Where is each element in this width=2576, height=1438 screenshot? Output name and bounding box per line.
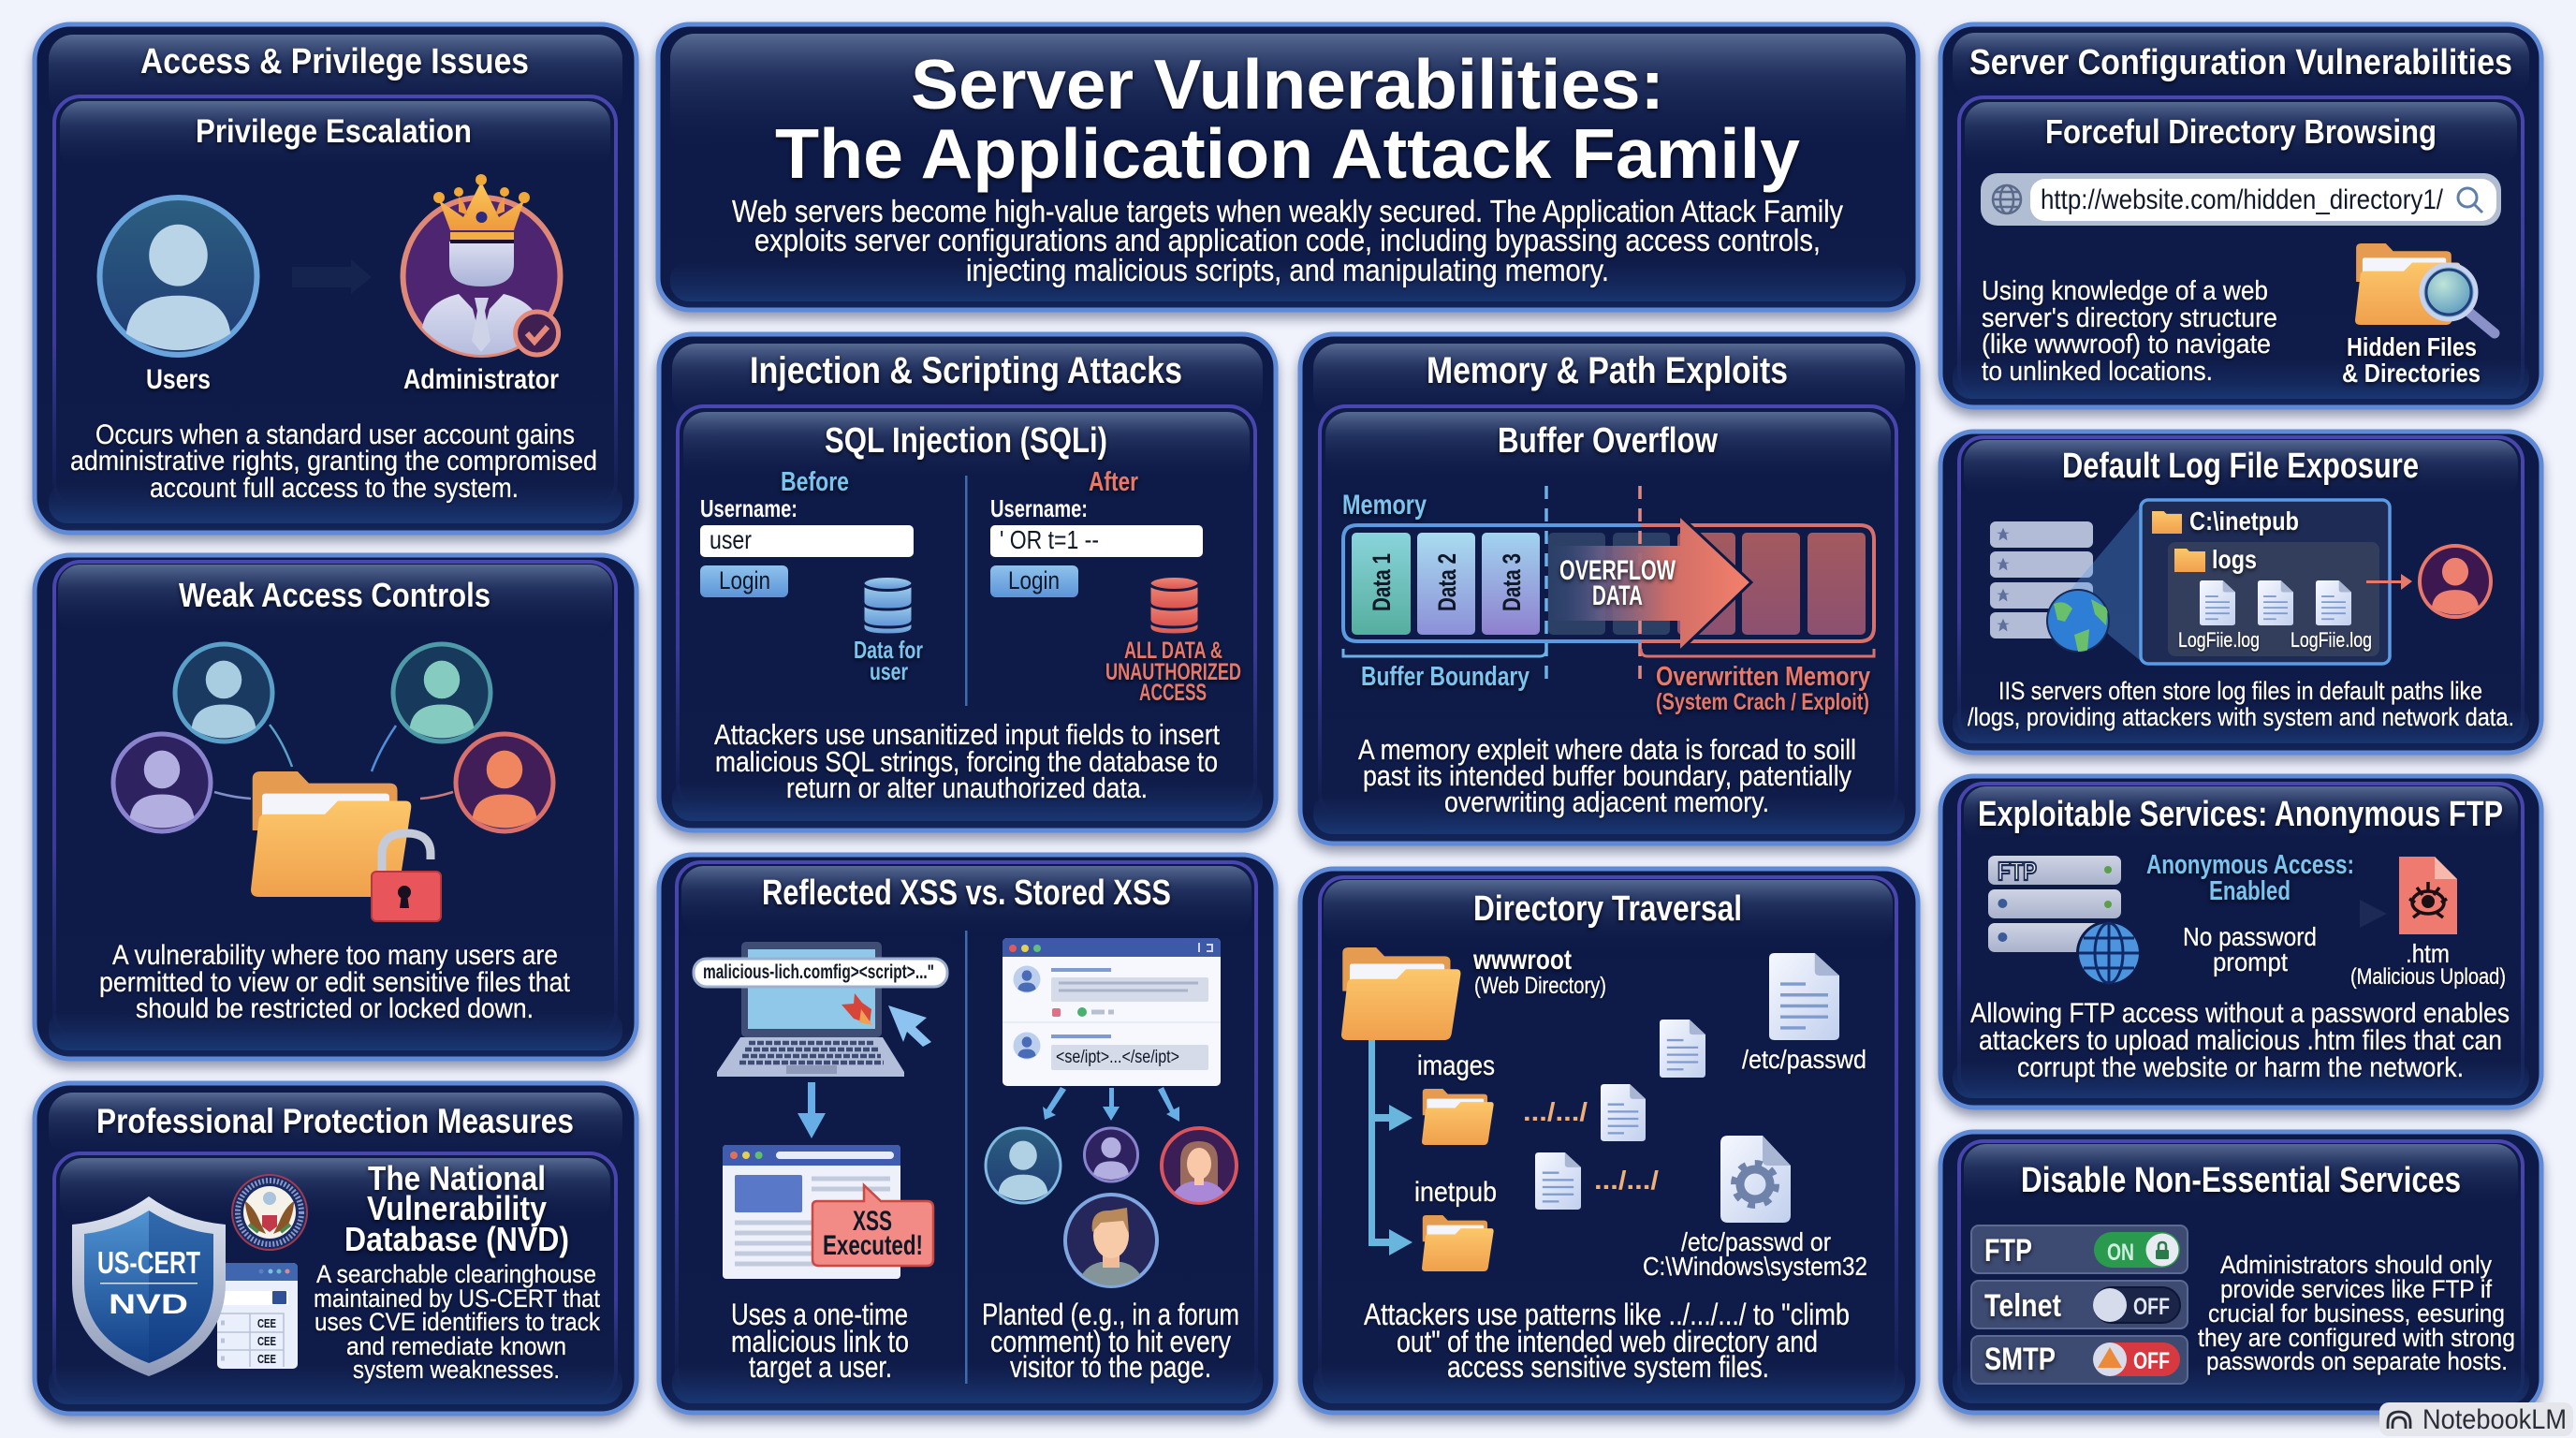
text block: intro: injecting malicious scripts, and manipulating memory.: [966, 253, 1609, 287]
label: administrator: Administrator: [403, 364, 559, 395]
icon: FTP server with globe: [1988, 856, 2142, 986]
text block: NVD description: maintained by US-CERT that: [314, 1284, 600, 1313]
label: wwwroot: (Web Directory): [1474, 973, 1606, 999]
heading: default log file exposure: Default Log File Exposure: [2062, 447, 2419, 486]
text block: disable services description: [2198, 1251, 2515, 1375]
chart: buffer overflow memory diagram: [1343, 486, 1874, 685]
label: malicious upload: (Malicious Upload): [2350, 964, 2506, 990]
icon: document middle: [1601, 1084, 1646, 1141]
panel: server configuration vulnerabilities: [1940, 24, 2541, 407]
text block: stored XSS description: comment) to hit every: [990, 1325, 1231, 1358]
text block: FTP description: [1970, 998, 2510, 1083]
heading: disable non-essential services: Disable Non-Essential Services: [2021, 1161, 2461, 1200]
file tree box: logs: [2212, 545, 2257, 574]
text block: forceful browsing description: server's directory structure: [1982, 303, 2277, 333]
text block: directory traversal description: [1364, 1298, 1850, 1384]
heading: the national vulnerability database: [344, 1159, 569, 1258]
label: all data and unauthorized access: UNAUTHORIZED: [1105, 659, 1241, 685]
address bar: http://website.com/hidden_directory1/: [2041, 184, 2444, 215]
panel: reflected vs stored XSS: [659, 855, 1276, 1413]
text block: weak access description: [99, 940, 571, 1024]
text block: stored XSS description: [982, 1298, 1239, 1384]
label: malicious upload: .htm: [2406, 939, 2450, 968]
arrow: upload: [2360, 900, 2387, 928]
chart: buffer overflow memory diagram: Data 1: [1368, 553, 1396, 611]
heading: the national vulnerability database: Database (NVD): [344, 1220, 569, 1258]
icon: user blue: [175, 644, 272, 741]
after column: [990, 467, 1203, 597]
icon: administrator with crown: [402, 174, 560, 374]
panel: memory and path exploits: [1300, 334, 1918, 844]
icon: user red: [456, 734, 553, 831]
label: overwritten memory: [1656, 662, 1870, 715]
icon: document top: [1660, 1020, 1705, 1078]
heading: injection and scripting attacks: Injection & Scripting Attacks: [750, 350, 1182, 391]
icon: visitor man: [1065, 1195, 1157, 1292]
icon: browser with XSS executed: XSS: [853, 1206, 892, 1237]
label: no password prompt: prompt: [2213, 947, 2288, 976]
text block: privilege escalation description: Occurs when a standard user account gains: [95, 419, 575, 450]
label: overwritten memory: Overwritten Memory: [1656, 662, 1870, 692]
text block: log exposure description: [1968, 677, 2514, 731]
arrows: script reaches visitors: [1043, 1087, 1179, 1122]
text block: NVD description: A searchable clearinghouse: [316, 1260, 596, 1288]
heading: reflected XSS vs stored XSS: Reflected XSS vs. Stored XSS: [762, 873, 1171, 913]
text block: SQL injection description: [714, 718, 1220, 804]
toggle: Telnet off: [1971, 1281, 2188, 1328]
text block: log exposure description: IIS servers often store log files in default paths like: [1998, 677, 2482, 705]
arrow: escalation: [292, 259, 372, 294]
label: hidden files and directories: & Directories: [2342, 359, 2481, 388]
text block: NVD description: uses CVE identifiers to track: [315, 1308, 600, 1336]
file tree box: LogFiie.log: [2178, 628, 2260, 652]
sub-heading: buffer overflow: Buffer Overflow: [1498, 421, 1718, 461]
heading: the national vulnerability database: Vulnerability: [367, 1189, 547, 1227]
text block: log exposure description: /logs, providing attackers with system and network data.: [1968, 703, 2514, 731]
icon: CVE table window: CEE: [257, 1352, 276, 1366]
icon: attacker: [2420, 546, 2491, 617]
address bar: [1981, 173, 2501, 226]
arrow: logs to attacker: [2366, 574, 2412, 590]
text block: NVD description: and remediate known: [346, 1332, 566, 1360]
text block: privilege escalation description: [70, 419, 597, 504]
panel: title: [658, 24, 1918, 310]
text block: NVD description: [314, 1260, 600, 1384]
text block: disable services description: crucial for business, eesuring: [2208, 1299, 2505, 1328]
icon: browser with XSS executed: [723, 1145, 933, 1279]
icon: laptop with malicious link: malicious-lich.comfig><script>...": [703, 961, 934, 983]
sub-panel: SQL injection: [678, 406, 1255, 809]
label: system files: [1643, 1227, 1867, 1281]
heading: access and privilege issues: Access & Privilege Issues: [140, 42, 529, 81]
label: all data and unauthorized access: [1105, 638, 1241, 706]
icon: user: [99, 198, 256, 355]
label: hidden files and directories: [2342, 332, 2481, 388]
label: data for user: [854, 636, 923, 685]
text block: FTP description: corrupt the website or harm the network.: [2017, 1052, 2464, 1083]
label: etc passwd: /etc/passwd: [1742, 1045, 1866, 1074]
label: wwwroot: wwwroot: [1472, 945, 1572, 976]
chart: buffer overflow memory diagram: OVERFLOW: [1559, 555, 1676, 586]
toggle: SMTP off: SMTP: [1984, 1342, 2056, 1377]
text block: directory traversal description: out" of the intended web directory and: [1397, 1325, 1818, 1358]
icon: images folder: [1422, 1089, 1494, 1145]
heading: directory traversal: Directory Traversal: [1473, 889, 1742, 929]
text block: directory traversal description: access sensitive system files.: [1447, 1350, 1769, 1384]
file tree box: [2141, 500, 2390, 664]
label: no password prompt: [2183, 922, 2317, 976]
label: anonymous access enabled: [2146, 850, 2354, 906]
panel: exploitable services anonymous FTP: [1940, 776, 2541, 1108]
label: memory: Memory: [1342, 490, 1427, 521]
text block: weak access description: should be restricted or locked down.: [136, 993, 534, 1024]
panel: injection and scripting attacks: [659, 334, 1276, 830]
label: users: Users: [146, 364, 211, 395]
toggle: Telnet off: OFF: [2133, 1294, 2170, 1320]
text block: stored XSS description: visitor to the page.: [1010, 1350, 1211, 1384]
icon: passwd document: [1769, 953, 1839, 1040]
text block: SQL injection description: malicious SQL strings, forcing the database to: [715, 745, 1218, 778]
toggle: FTP on: [1971, 1225, 2188, 1273]
text block: buffer overflow description: [1358, 733, 1856, 818]
sub-panel: national vulnerability database: [54, 1153, 616, 1399]
icon: forum window with stored script: [1003, 938, 1221, 1086]
icon: shield US-CERT NVD: [72, 1196, 226, 1376]
text block: forceful browsing description: Using knowledge of a web: [1982, 276, 2268, 306]
text block: SQL injection description: return or alter unauthorized data.: [786, 771, 1148, 804]
icon: document lower: [1535, 1152, 1581, 1210]
text block: buffer overflow description: overwriting adjacent memory.: [1444, 785, 1769, 818]
heading: professional protection measures: Professional Protection Measures: [96, 1102, 574, 1140]
panel: default log file exposure: [1940, 432, 2541, 753]
text block: buffer overflow description: past its intended buffer boundary, patentially: [1363, 759, 1852, 792]
sub-heading: SQL injection: SQL Injection (SQLi): [825, 421, 1107, 461]
heading: server configuration vulnerabilities: Server Configuration Vulnerabilities: [1969, 43, 2512, 82]
label: buffer boundary: Buffer Boundary: [1361, 662, 1530, 692]
title: Server Vulnerabilities:: [911, 45, 1664, 124]
label: malicious upload: [2350, 939, 2506, 990]
toggle: FTP on: ON: [2107, 1240, 2134, 1266]
text block: FTP description: Allowing FTP access without a password enables: [1970, 998, 2510, 1029]
icon: CVE table window: [217, 1263, 298, 1369]
text block: privilege escalation description: administrative rights, granting the compromised: [70, 446, 597, 477]
icon: malicious file: [2399, 857, 2457, 934]
icon: shield US-CERT NVD: US-CERT: [97, 1245, 200, 1280]
connection lines: [214, 725, 453, 799]
text block: reflected XSS description: [731, 1298, 909, 1384]
heading: memory and path exploits: Memory & Path Exploits: [1427, 350, 1788, 391]
arrows: directory tree: [1368, 1040, 1412, 1255]
label: inetpub: inetpub: [1414, 1177, 1497, 1208]
title: [775, 45, 1800, 193]
text block: intro: exploits server configurations and application code, including bypassing access controls,: [754, 223, 1821, 257]
icon: government seal: [232, 1175, 307, 1250]
text block: reflected XSS description: target a user.: [749, 1350, 892, 1384]
chart: buffer overflow memory diagram: Data 3: [1498, 553, 1526, 611]
label: overwritten memory: (System Crach / Exploit): [1656, 689, 1869, 715]
text block: forceful browsing description: (like wwwroof) to navigate: [1982, 330, 2271, 360]
text block: disable services description: Administrators should only: [2220, 1251, 2492, 1279]
toggle: Telnet off: Telnet: [1984, 1288, 2061, 1324]
text block: disable services description: provide services like FTP if: [2220, 1275, 2492, 1303]
text block: buffer overflow description: A memory expleit where data is forcad to soill: [1358, 733, 1856, 766]
icon: wwwroot folder: [1341, 947, 1460, 1040]
sub-panel: buffer overflow: [1320, 406, 1896, 818]
icon: forum window with stored script: <se/ipt>...</se/ipt>: [1056, 1048, 1179, 1067]
heading: the national vulnerability database: The National: [368, 1159, 546, 1197]
icon: open folder: [251, 771, 411, 897]
after column: ' OR t=1 --: [1000, 525, 1099, 554]
icon: CVE table window: CEE: [257, 1334, 276, 1348]
arrow: down to browser: [798, 1082, 826, 1138]
heading: weak access controls: Weak Access Controls: [179, 576, 490, 614]
after column: Username:: [990, 494, 1088, 522]
text block: SQL injection description: Attackers use unsanitized input fields to insert: [714, 718, 1220, 751]
text block: privilege escalation description: account full access to the system.: [150, 473, 519, 504]
icon: system gear document: [1720, 1136, 1791, 1223]
chart: buffer overflow memory diagram: DATA: [1592, 580, 1643, 611]
text block: disable services description: passwords on separate hosts.: [2206, 1347, 2508, 1375]
icon: database normal: [863, 577, 913, 635]
before column: [700, 467, 914, 597]
toggle: FTP on: FTP: [1984, 1233, 2032, 1269]
after column: Login: [1008, 566, 1060, 594]
icon: user teal: [393, 644, 490, 741]
text block: forceful browsing description: to unlinked locations.: [1982, 357, 2213, 387]
title: The Application Attack Family: [775, 114, 1800, 193]
before column: Login: [719, 566, 770, 594]
text block: stored XSS description: Planted (e.g., in a forum: [982, 1298, 1239, 1331]
label: wwwroot: [1472, 945, 1606, 999]
icon: inetpub folder: [1422, 1215, 1494, 1271]
label: system files: /etc/passwd or: [1681, 1227, 1831, 1256]
icon: user purple: [113, 734, 211, 831]
text block: NVD description: system weaknesses.: [353, 1356, 560, 1384]
icon: visitor blue: [986, 1128, 1061, 1203]
toggle: SMTP off: [1971, 1336, 2188, 1384]
label: traversal pattern lower: .../.../: [1594, 1166, 1659, 1195]
sub-heading: forceful directory browsing: Forceful Directory Browsing: [2045, 112, 2437, 151]
before column: Before: [781, 467, 849, 497]
label: system files: C:\Windows\system32: [1643, 1252, 1867, 1281]
text block: weak access description: A vulnerability where too many users are: [112, 940, 558, 971]
icon: visitor woman: [1162, 1128, 1237, 1208]
file tree box: C:\inetpub: [2189, 506, 2299, 536]
panel: professional protection measures: [35, 1083, 637, 1414]
icon: laptop with malicious link: [694, 942, 947, 1077]
text block: reflected XSS description: Uses a one-time: [731, 1298, 908, 1331]
icon: database breached: [1149, 577, 1199, 635]
icon: cursor arrow: [888, 1005, 931, 1047]
text block: FTP description: attackers to upload malicious .htm files that can: [1979, 1025, 2502, 1056]
label: traversal pattern upper: .../.../: [1523, 1097, 1588, 1126]
label: hidden files and directories: Hidden Files: [2347, 332, 2477, 361]
toggle: SMTP off: OFF: [2133, 1348, 2170, 1374]
chart: buffer overflow memory diagram: Data 2: [1433, 553, 1461, 611]
before column: Username:: [700, 494, 798, 522]
text block: forceful browsing description: [1982, 276, 2277, 387]
icon: folder with magnifier: [2355, 243, 2495, 333]
icon: CVE table window: CEE: [257, 1316, 276, 1330]
sub-heading: privilege escalation: Privilege Escalation: [196, 113, 472, 150]
sub-panel: forceful directory browsing: [1959, 97, 2523, 397]
icon: visitor purple: [1084, 1128, 1138, 1181]
label: anonymous access enabled: Anonymous Access:: [2146, 850, 2354, 880]
file tree box: LogFiie.log: [2291, 628, 2372, 652]
text block: weak access description: permitted to view or edit sensitive files that: [99, 967, 571, 998]
label: data for user: Data for: [854, 636, 923, 664]
label: data for user: user: [870, 657, 908, 685]
text block: directory traversal description: Attackers use patterns like ../.../.../ to "climb: [1364, 1298, 1850, 1331]
divider: [965, 476, 968, 706]
label: no password prompt: No password: [2183, 922, 2317, 951]
label: anonymous access enabled: Enabled: [2209, 876, 2291, 906]
icon: shield US-CERT NVD: NVD: [109, 1289, 188, 1320]
icon: FTP server with globe: FTP: [1998, 857, 2037, 886]
icon: open padlock: [372, 833, 441, 921]
label: images: images: [1417, 1050, 1495, 1081]
text block: intro: [732, 194, 1843, 287]
before column: user: [710, 525, 752, 554]
sub-panel: privilege escalation: [54, 96, 616, 508]
after column: After: [1089, 467, 1138, 497]
label: all data and unauthorized access: ACCESS: [1139, 680, 1207, 706]
icon: browser with XSS executed: Executed!: [823, 1230, 923, 1261]
panel: weak access controls: [35, 555, 637, 1059]
label: all data and unauthorized access: ALL DATA &: [1124, 638, 1222, 664]
text block: intro: Web servers become high-value targets when weakly secured. The Application Attack Family: [732, 194, 1843, 228]
panel: disable non-essential services: [1940, 1132, 2541, 1413]
panel: directory traversal: [1300, 869, 1918, 1413]
panel: access and privilege issues: [35, 24, 637, 533]
divider: [965, 931, 968, 1384]
text block: disable services description: they are configured with strong: [2198, 1324, 2515, 1352]
icon: server rack with globe: [1990, 506, 2141, 661]
text block: reflected XSS description: malicious link to: [731, 1325, 909, 1358]
